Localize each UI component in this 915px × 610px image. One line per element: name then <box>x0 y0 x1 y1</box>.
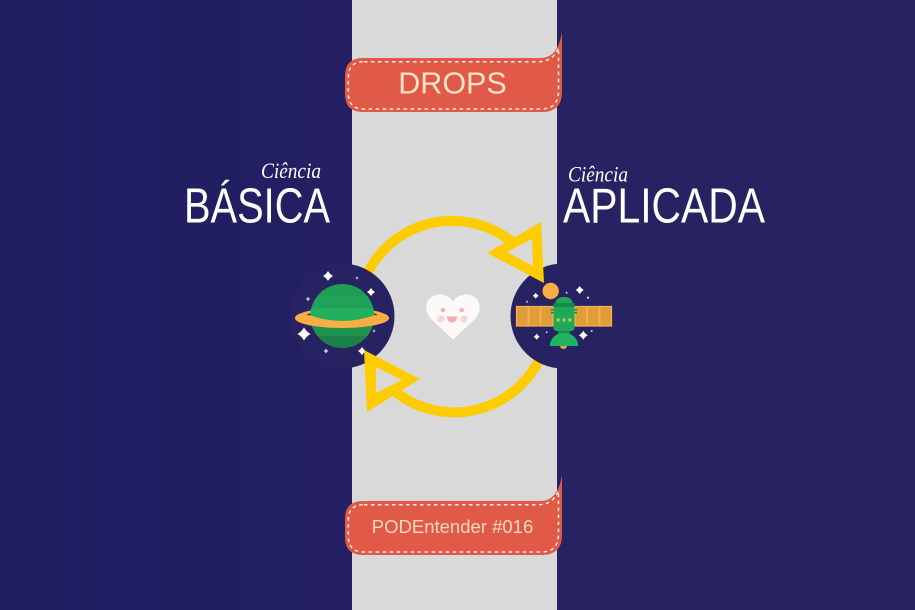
arrow arc: top of cycle <box>368 221 512 272</box>
infographic canvas <box>187 0 765 610</box>
banner episode text: PODEntender #016 <box>372 516 533 537</box>
banner: episode <box>345 475 562 555</box>
heading: Ciência Aplicada: Ciência <box>568 162 628 186</box>
icon: satellite <box>510 264 616 368</box>
heading: Ciência Aplicada: APLICADA <box>563 178 765 234</box>
heading: Ciência Básica <box>184 158 330 234</box>
heading: Ciência Básica: BÁSICA <box>184 178 330 234</box>
panel: right background <box>557 0 915 610</box>
heading: Ciência Básica: Ciência <box>261 158 321 183</box>
arrow arc: bottom of cycle <box>393 360 539 412</box>
icon: smiling heart <box>426 294 480 340</box>
banner: DROPS <box>345 32 562 112</box>
icon: planet <box>290 264 394 368</box>
panel: central grey column <box>352 0 557 610</box>
arrowhead: bottom left triangle <box>364 350 420 412</box>
heading: Ciência Aplicada <box>563 162 765 234</box>
banner title: DROPS <box>398 66 507 100</box>
arrowhead: top right triangle <box>487 222 544 283</box>
panel: left background <box>0 0 352 610</box>
